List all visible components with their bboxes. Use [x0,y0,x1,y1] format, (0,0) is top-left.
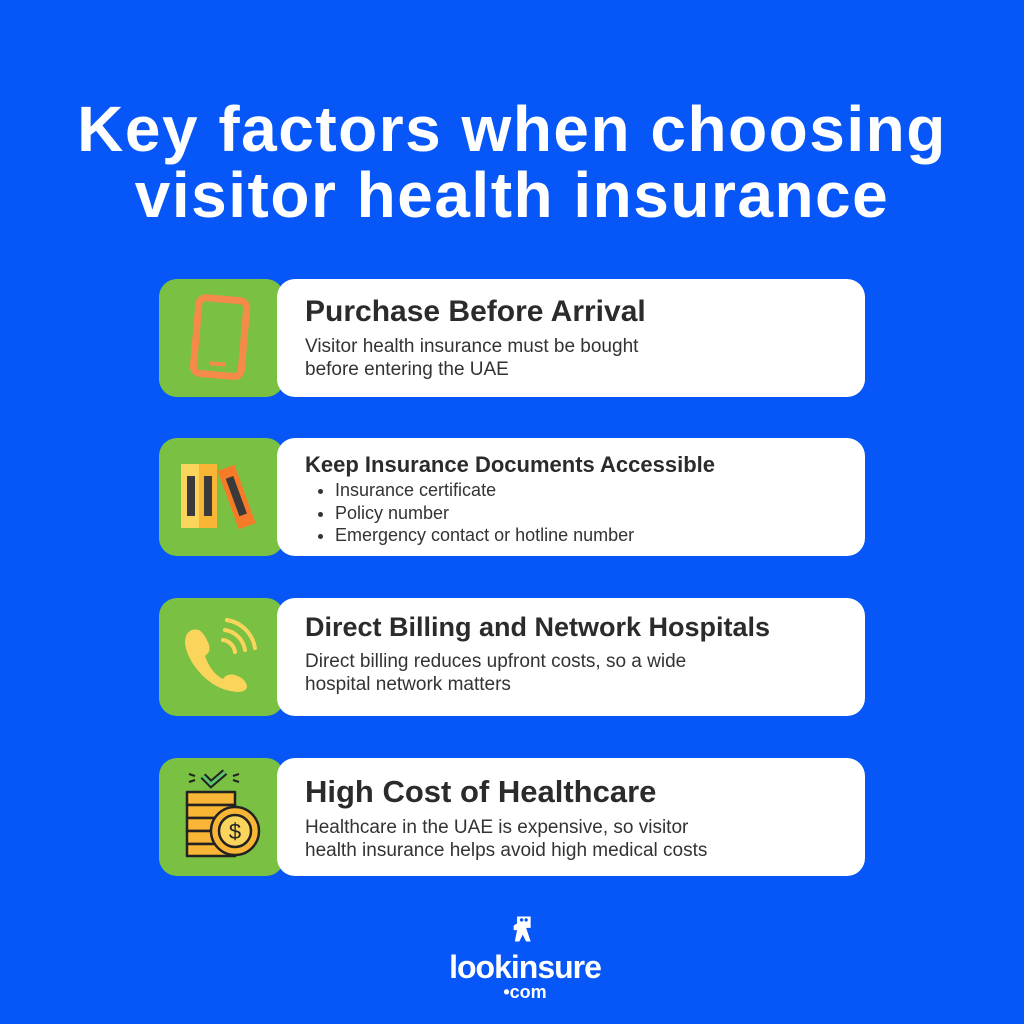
card text: Keep Insurance Documents Accessible [305,452,715,477]
card text: Insurance certificate [335,480,496,500]
card text: health insurance helps avoid high medical costs [305,840,707,861]
card text: Visitor health insurance must be bought [305,336,638,357]
row: direct billing [159,598,865,716]
title: Key factors when choosing [77,93,947,165]
title [77,93,947,231]
icon: phone call [159,598,284,716]
card text: Healthcare in the UAE is expensive, so visitor [305,817,688,838]
card text [277,598,865,716]
logo: •com [503,982,547,1002]
card text: Direct Billing and Network Hospitals [305,612,770,642]
icon: coins [159,758,284,876]
card text: High Cost of Healthcare [305,774,656,809]
logo [449,916,601,1002]
card text: before entering the UAE [305,359,509,380]
title: visitor health insurance [135,159,889,231]
card text: Policy number [335,502,449,522]
card text: Direct billing reduces upfront costs, so a wide [305,651,686,672]
card text: Emergency contact or hotline number [335,525,634,545]
card text: hospital network matters [305,674,511,695]
row: documents [159,438,865,556]
card text [277,438,865,556]
row: purchase before arrival [159,279,865,397]
logo: lookinsure [449,949,601,985]
icon: coins: $ [229,819,241,844]
card text: Purchase Before Arrival [305,295,646,328]
card text [277,758,865,876]
icon: phone [159,279,284,397]
card text [277,279,865,397]
icon: binders [159,438,284,556]
row: high cost [159,758,865,876]
